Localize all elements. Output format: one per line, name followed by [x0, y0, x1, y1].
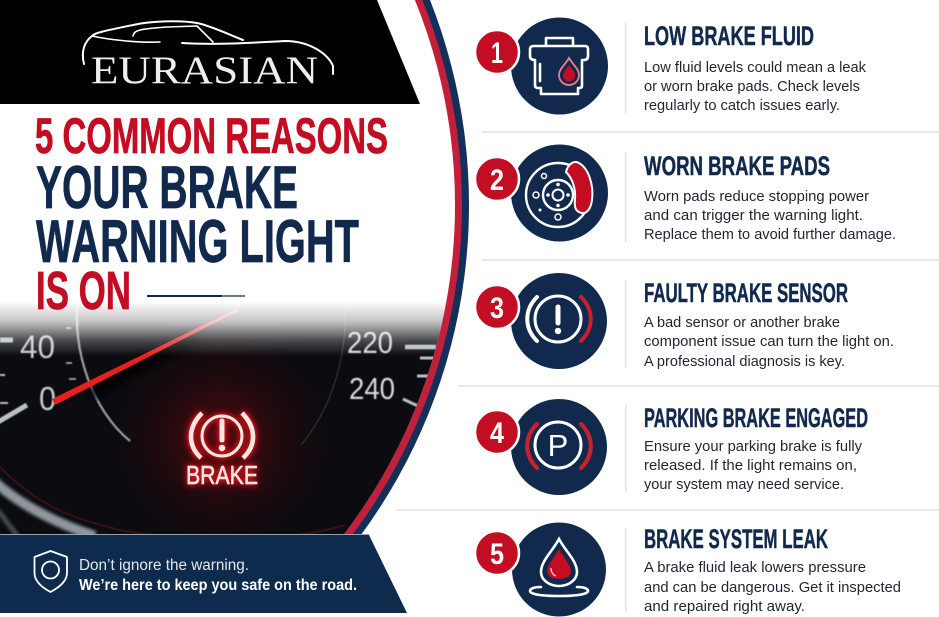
number badge 4: 4 [490, 417, 504, 450]
bottom banner: We’re here to keep you safe on the road. [79, 577, 357, 594]
title: 5 COMMON REASONS [35, 108, 388, 164]
divider [458, 385, 939, 387]
description: your system may need service. [644, 477, 844, 493]
gauge numbers: 220 [347, 325, 393, 360]
dashboard photo [0, 288, 470, 539]
gauge numbers: 240 [349, 371, 395, 406]
description [644, 315, 894, 370]
title rule [147, 295, 245, 297]
divider [482, 259, 939, 261]
icon: brake disc [511, 144, 608, 242]
divider [396, 509, 939, 511]
description: regularly to catch issues early. [644, 98, 840, 114]
number badge 4 [475, 410, 519, 454]
item 4: parking brake engaged [475, 399, 868, 495]
icon: parking brake [511, 399, 607, 495]
number badge 2 [475, 157, 519, 201]
gauge numbers: 0 [39, 380, 56, 417]
speedometer needle [52, 309, 238, 405]
title: WARNING LIGHT [36, 208, 359, 275]
divider [482, 131, 939, 133]
number badge 3: 3 [490, 292, 504, 325]
description [644, 560, 901, 615]
description: Ensure your parking brake is fully [644, 439, 863, 455]
title [35, 108, 388, 321]
curved red and navy border [0, 0, 469, 536]
description: and can trigger the warning light. [644, 208, 863, 224]
brake warning light [186, 413, 258, 490]
banner text: Don’t ignore the warning. [79, 557, 249, 574]
number badge 1 [475, 30, 519, 74]
number badge 1: 1 [491, 37, 503, 70]
description: Low fluid levels could mean a leak [644, 60, 867, 76]
description: A bad sensor or another brake [644, 315, 840, 331]
description: Replace them to avoid further damage. [644, 227, 896, 243]
bottom banner [0, 534, 407, 613]
description [644, 189, 896, 243]
description: A professional diagnosis is key. [644, 354, 845, 370]
description: and repaired right away. [644, 599, 805, 615]
heading: WORN BRAKE PADS [644, 151, 830, 181]
gauge ticks [0, 328, 436, 422]
number badge 5: 5 [490, 538, 504, 571]
item 5: brake system leak [475, 522, 901, 616]
number badge 3 [475, 285, 519, 329]
item 3: faulty brake sensor [475, 273, 894, 370]
number badge 5 [475, 531, 519, 575]
title: YOUR BRAKE [36, 154, 298, 221]
title: IS ON [36, 261, 131, 321]
icon: parking brake: P [548, 428, 568, 463]
logo: wordmark: EURASIAN [91, 49, 318, 92]
logo banner [0, 0, 420, 104]
white fade over photo [0, 288, 470, 356]
gauge numbers [20, 331, 395, 411]
icon: reservoir [511, 18, 608, 114]
heading: BRAKE SYSTEM LEAK [644, 524, 828, 554]
description [644, 439, 863, 493]
item 2: worn brake pads [475, 144, 896, 243]
icon: fluid leak [512, 522, 606, 616]
number badge 2: 2 [490, 164, 504, 197]
description: component issue can turn the light on. [644, 334, 894, 350]
icon: shield [34, 551, 67, 592]
description: Worn pads reduce stopping power [644, 189, 869, 205]
description: released. If the light remains on, [644, 458, 857, 474]
icon: warning light [511, 273, 607, 369]
item 1: low brake fluid [475, 18, 867, 114]
description: or worn brake pads. Check levels [644, 79, 860, 95]
brake warning light: BRAKE [186, 460, 258, 490]
logo: car outline [83, 21, 333, 74]
gauge numbers: 40 [20, 329, 55, 365]
description: A brake fluid leak lowers pressure [644, 560, 866, 576]
heading: LOW BRAKE FLUID [644, 21, 814, 51]
gauge arcs [0, 300, 345, 539]
description: and can be dangerous. Get it inspected [644, 580, 901, 596]
description [644, 60, 867, 114]
